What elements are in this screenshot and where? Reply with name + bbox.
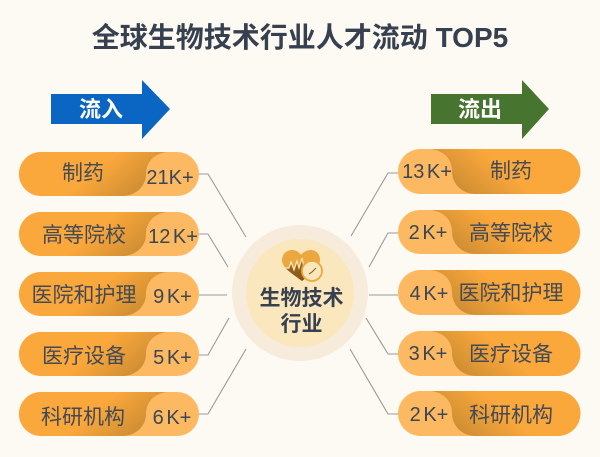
pill: inflow universities: 12 K+	[148, 226, 198, 248]
pill: outflow research: 2 K+	[410, 404, 448, 426]
pill: outflow research: 科研机构	[469, 404, 553, 427]
arrow: inflow: 流入	[79, 97, 123, 122]
pill: inflow research: 6 K+	[153, 407, 191, 429]
pill: inflow pharma: 21K+	[146, 167, 194, 189]
arrow: outflow: 流出	[458, 97, 502, 122]
title: 全球生物技术行业人才流动 TOP5	[92, 22, 508, 53]
pill: inflow healthcare: 医院和护理	[32, 284, 136, 307]
icon: heart with clock	[282, 250, 323, 282]
arrow: outflow	[431, 80, 549, 139]
pill: outflow universities: 2 K+	[409, 222, 447, 244]
pill: outflow universities: 高等院校	[469, 222, 553, 245]
pill: outflow healthcare: 4 K+	[410, 283, 448, 305]
arrow: inflow	[51, 80, 170, 139]
pill: inflow universities: 高等院校	[42, 224, 126, 247]
hub outer ring	[232, 225, 368, 361]
pill: outflow pharma	[398, 149, 580, 194]
pill: outflow pharma: 制药	[490, 160, 532, 183]
pill: outflow universities	[398, 210, 580, 254]
center hub	[232, 225, 368, 361]
panel: outflow pills	[398, 149, 580, 436]
pill: inflow pharma	[19, 152, 199, 196]
pill: inflow healthcare	[19, 272, 199, 316]
pill: inflow medical devices: 5 K+	[153, 347, 192, 369]
hub label: 生物技术	[260, 287, 344, 310]
pill: outflow research	[398, 391, 580, 436]
pill: inflow medical devices	[19, 332, 199, 376]
pill: outflow medical devices	[398, 331, 580, 376]
pill: inflow medical devices: 医疗设备	[42, 345, 126, 368]
pill: outflow medical devices: 医疗设备	[469, 343, 553, 366]
pill: inflow research: 科研机构	[41, 406, 125, 429]
pill: inflow pharma: 制药	[62, 162, 104, 185]
pill: outflow healthcare: 医院和护理	[458, 282, 564, 305]
panel: inflow pills	[19, 152, 199, 436]
pill: inflow research	[19, 392, 199, 436]
pill: inflow healthcare: 9 K+	[153, 286, 192, 308]
pill: inflow universities	[19, 212, 199, 256]
hub inner circle	[246, 239, 354, 347]
pill: outflow pharma: 13 K+	[402, 161, 452, 183]
pill: outflow healthcare	[398, 270, 580, 315]
connector lines	[199, 173, 398, 414]
pill: outflow medical devices: 3 K+	[409, 343, 447, 365]
center hub: 行业	[280, 313, 322, 336]
